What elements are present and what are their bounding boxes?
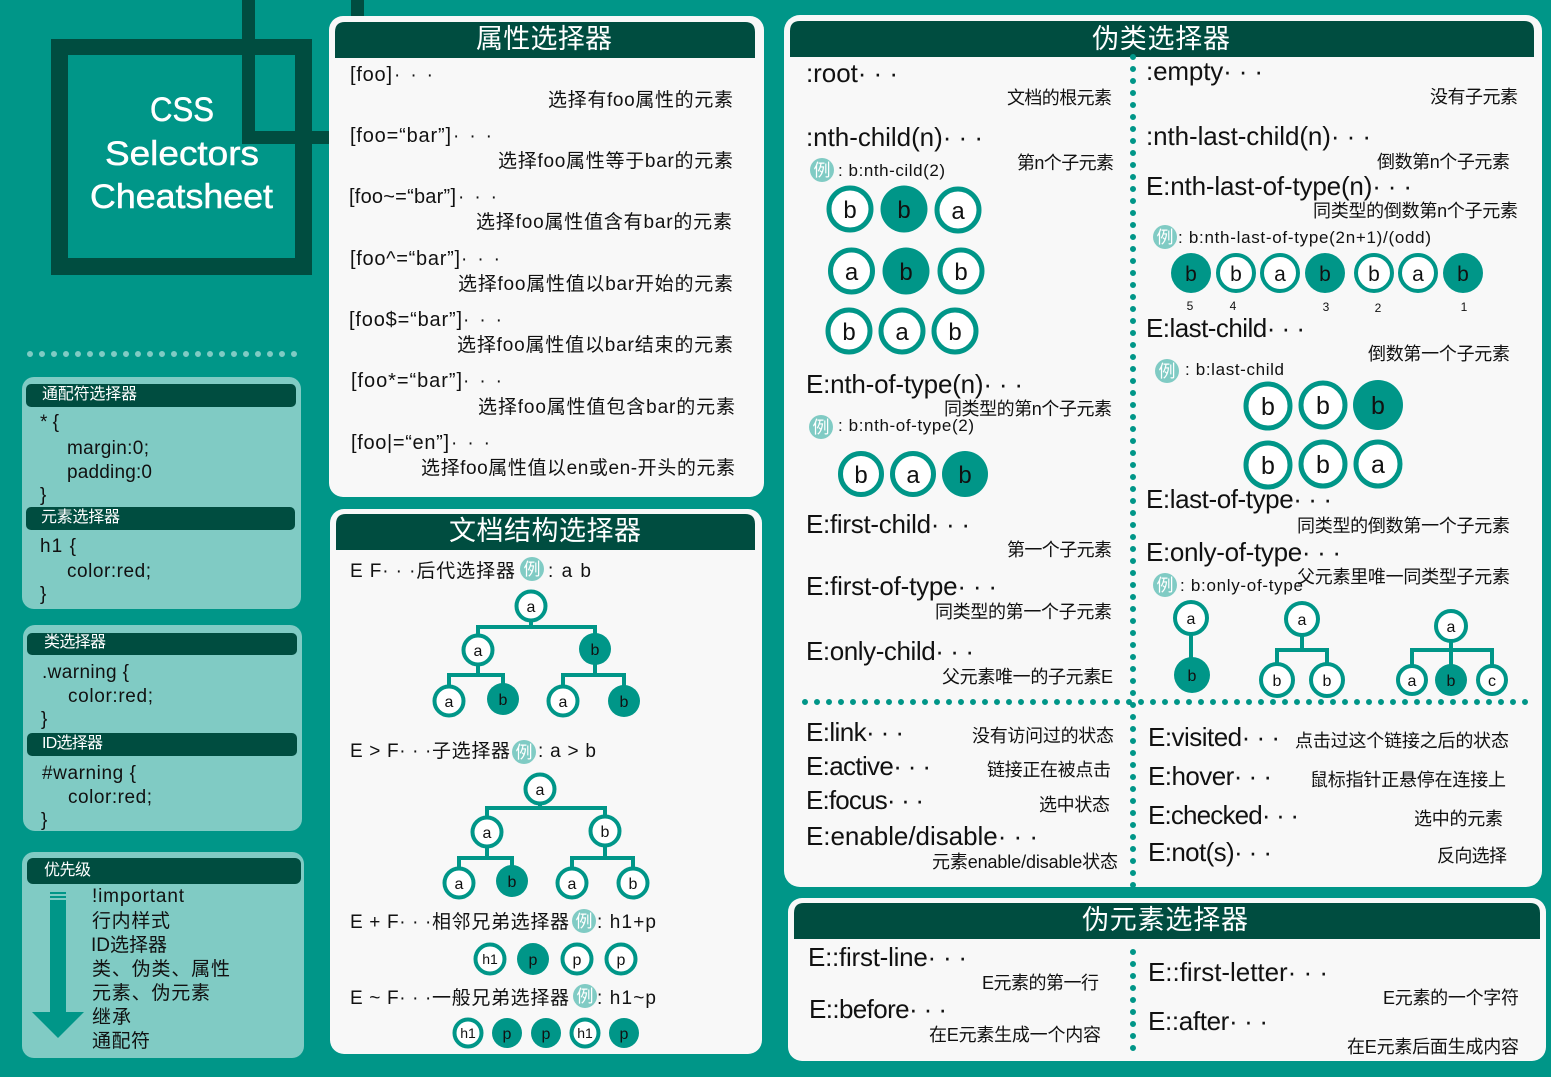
- circles: nth-last-of-type: 4: [1230, 299, 1237, 313]
- entry: [foo="bar"]: 选择foo属性等于bar的元素: [498, 150, 733, 172]
- entry: last-child: 倒数第一个子元素: [1368, 344, 1510, 364]
- tree: descendant example: b: [591, 642, 600, 659]
- entry: only-of-type: 父元素里唯一同类型子元素: [1297, 567, 1510, 587]
- entry: descendant selector: : a b: [548, 561, 591, 582]
- entry: descendant selector: [350, 557, 591, 582]
- circles: nth-child: b: [948, 319, 962, 346]
- entry: first-of-type: 同类型的第一个子元素: [935, 602, 1112, 622]
- panel: universal and element selectors: [22, 377, 301, 609]
- code: universal selector: padding:0: [67, 462, 152, 483]
- entry: first-child: [806, 509, 1112, 560]
- entry: [foo$="bar"]: · · ·: [463, 310, 502, 331]
- entry: [foo~="bar"]: [349, 186, 732, 233]
- entry: root: 文档的根元素: [1007, 88, 1112, 108]
- entry: enable/disable: E:enable/disable· · ·: [806, 821, 1038, 851]
- entry: nth-of-type: E:nth-of-type(n)· · ·: [806, 369, 1023, 399]
- code: universal selector: }: [40, 485, 46, 506]
- trees: only-of-type: a: [1187, 611, 1196, 628]
- entry: empty: [1146, 56, 1518, 107]
- panel: attribute selectors: [329, 16, 764, 497]
- entry: first-line: E元素的第一行: [982, 973, 1099, 993]
- circles: nth-last-of-type: b: [1319, 263, 1331, 286]
- entry: general sibling selector: : h1~p: [597, 988, 656, 1009]
- circles: nth-of-type: a: [906, 462, 920, 489]
- entry: checked: E:checked· · ·: [1148, 800, 1299, 830]
- trees: only-of-type: [1174, 602, 1506, 696]
- heading: pseudo-class selectors: 伪类选择器: [1092, 24, 1230, 54]
- example: last-child: 例: [1158, 362, 1176, 381]
- entry: [foo]: 选择有foo属性的元素: [548, 89, 733, 111]
- entry: after: E::after· · ·: [1148, 1006, 1268, 1036]
- entry: [foo~="bar"]: · · ·: [458, 187, 497, 208]
- circles: last-child: a: [1371, 451, 1385, 479]
- trees: only-of-type: a: [1408, 673, 1417, 690]
- entry: only-child: [806, 636, 1113, 687]
- tree: child example: b: [508, 874, 517, 891]
- entry: focus: E:focus· · ·: [806, 785, 924, 815]
- entry: general sibling selector: E ~ F· · ·一般兄弟选择器: [350, 987, 569, 1009]
- code: element selector: }: [40, 584, 46, 605]
- entry: nth-last-child: [1146, 121, 1510, 172]
- entry: [foo]: · · ·: [394, 65, 433, 86]
- heading: class selector: [27, 633, 297, 655]
- list: priority order: !important: [92, 886, 185, 907]
- entry: adjacent sibling selector: E + F· · ·相邻兄弟选择器: [350, 911, 569, 933]
- entry: active: [806, 751, 1111, 781]
- circles: nth-last-of-type: [1171, 253, 1483, 315]
- circles: nth-last-of-type: b: [1368, 263, 1380, 286]
- entry: nth-last-child: 倒数第n个子元素: [1377, 152, 1510, 172]
- title block: [51, 0, 364, 275]
- entry: [foo^="bar"]: · · ·: [461, 249, 500, 270]
- panel: pseudo-class selectors: [784, 15, 1542, 887]
- heading: id selector: [27, 733, 297, 756]
- heading: priority: 优先级: [44, 861, 91, 879]
- circles: adjacent sibling example: p: [529, 952, 538, 969]
- code: class selector: [41, 662, 153, 730]
- circles: nth-last-of-type: 2: [1375, 301, 1382, 315]
- entry: [foo$="bar"]: [349, 309, 733, 356]
- circles: last-child: b: [1261, 452, 1275, 480]
- entry: [foo^="bar"]: 选择foo属性值以bar开始的元素: [458, 273, 733, 295]
- entry: [foo^="bar"]: [foo^=“bar”]: [350, 248, 460, 270]
- heading: id selector: ID选择器: [42, 734, 103, 752]
- circles: adjacent sibling example: p: [573, 952, 582, 969]
- entry: not: 反向选择: [1437, 846, 1507, 866]
- circles: last-child: [1246, 380, 1403, 487]
- example: nth-last-of-type: : b:nth-last-of-type(2n+1)/(odd): [1178, 228, 1431, 247]
- entry: general sibling selector: [350, 984, 656, 1009]
- entry: before: 在E元素生成一个内容: [929, 1025, 1101, 1045]
- entry: child selector: [350, 740, 596, 764]
- entry: last-child: [1146, 313, 1510, 364]
- entry: before: [809, 994, 1101, 1045]
- circles: nth-of-type: [840, 451, 988, 497]
- circles: nth-child: b: [897, 197, 911, 224]
- entry: last-of-type: E:last-of-type· · ·: [1146, 484, 1332, 514]
- trees: only-of-type: b: [1273, 673, 1282, 690]
- circles: nth-child: a: [951, 198, 965, 225]
- entry: [foo="bar"]: [foo=“bar”]: [350, 125, 451, 147]
- example: only-of-type: 例: [1156, 576, 1174, 595]
- entry: adjacent sibling selector: 例: [576, 912, 592, 931]
- trees: only-of-type: b: [1188, 668, 1197, 685]
- entry: first-letter: E元素的一个字符: [1383, 988, 1519, 1008]
- circles: nth-last-of-type: 1: [1461, 300, 1468, 314]
- circles: adjacent sibling example: h1: [482, 951, 498, 967]
- example: only-of-type: : b:only-of-type: [1180, 576, 1303, 595]
- code: class selector: }: [41, 709, 47, 730]
- heading: attribute selectors: [335, 22, 755, 58]
- list: priority order: 类、伪类、属性: [92, 958, 230, 980]
- code: id selector: [41, 763, 152, 831]
- circles: nth-of-type: b: [854, 462, 868, 489]
- trees: only-of-type: b: [1447, 673, 1456, 690]
- circles: general sibling example: h1: [460, 1025, 476, 1041]
- circles: nth-child: [828, 186, 982, 352]
- entry: first-letter: E::first-letter· · ·: [1148, 957, 1328, 987]
- entry: enable/disable: [806, 821, 1118, 872]
- entry: [foo^="bar"]: [350, 248, 733, 295]
- example: nth-of-type: [809, 415, 974, 439]
- entry: nth-last-of-type: 同类型的倒数第n个子元素: [1313, 201, 1518, 221]
- list: priority order: [91, 886, 230, 1052]
- circles: nth-last-of-type: b: [1230, 263, 1242, 286]
- tree: descendant example: b: [620, 694, 629, 711]
- code: class selector: color:red;: [68, 686, 153, 707]
- circles: nth-child: b: [899, 259, 913, 286]
- entry: nth-of-type: [806, 369, 1112, 419]
- entry: hover: [1148, 761, 1506, 791]
- entry: last-child: E:last-child· · ·: [1146, 313, 1305, 343]
- entry: only-of-type: E:only-of-type· · ·: [1146, 537, 1341, 567]
- circles: last-child: b: [1371, 392, 1385, 420]
- heading: universal selector: [26, 384, 296, 407]
- entry: only-of-type: [1146, 537, 1510, 587]
- tree: descendant example: a: [527, 599, 536, 616]
- circles: nth-child: a: [895, 319, 909, 346]
- title block: CSS: [150, 91, 214, 129]
- entry: checked: 选中的元素: [1414, 809, 1503, 829]
- code: id selector: }: [41, 810, 47, 831]
- entry: first-line: E::first-line· · ·: [808, 942, 967, 972]
- entry: [foo="bar"]: · · ·: [453, 126, 492, 147]
- circles: adjacent sibling example: p: [617, 952, 626, 969]
- entry: [foo~="bar"]: 选择foo属性值含有bar的元素: [476, 211, 732, 233]
- entry: [foo*="bar"]: [foo*=“bar”]: [351, 370, 462, 392]
- list: priority order: ID选择器: [91, 934, 167, 956]
- circles: general sibling example: p: [503, 1026, 512, 1043]
- circles: nth-child: a: [845, 259, 859, 286]
- heading: pseudo-element selectors: 伪元素选择器: [1082, 905, 1248, 935]
- entry: active: 链接正在被点击: [987, 760, 1111, 780]
- entry: after: 在E元素后面生成内容: [1347, 1037, 1519, 1057]
- panel: pseudo-element selectors: [788, 898, 1546, 1061]
- entry: [foo*="bar"]: 选择foo属性值包含bar的元素: [478, 396, 735, 418]
- tree: descendant example: a: [445, 694, 454, 711]
- entry: active: E:active· · ·: [806, 751, 931, 781]
- code: universal selector: * {: [40, 412, 60, 433]
- list: priority order: 元素、伪元素: [92, 982, 210, 1004]
- entry: child selector: E > F· · ·子选择器: [350, 740, 510, 762]
- entry: child selector: : a > b: [538, 741, 596, 762]
- code: id selector: #warning {: [42, 763, 137, 784]
- entry: first-of-type: [806, 571, 1112, 622]
- tree: child example: a: [568, 876, 577, 893]
- entry: [foo="bar"]: [350, 125, 733, 172]
- entry: nth-child: :nth-child(n)· · ·: [806, 122, 983, 152]
- example: last-child: [1155, 359, 1284, 383]
- circles: nth-of-type: b: [958, 462, 972, 489]
- tree: child example: a: [483, 825, 492, 842]
- entry: only-child: E:only-child· · ·: [806, 636, 974, 666]
- entry: checked: [1148, 800, 1503, 830]
- entry: first-line: [808, 942, 1099, 993]
- entry: root: :root· · ·: [806, 58, 898, 88]
- entry: visited: E:visited· · ·: [1148, 722, 1280, 752]
- circles: general sibling example: h1: [577, 1025, 593, 1041]
- entry: [foo|="en"]: [foo|=“en”]: [351, 432, 449, 454]
- entry: link: 没有访问过的状态: [972, 726, 1114, 746]
- heading: document structure selectors: [336, 514, 755, 550]
- circles: adjacent sibling example: [476, 943, 636, 975]
- entry: only-child: 父元素唯一的子元素E: [942, 667, 1113, 687]
- code: universal selector: margin:0;: [67, 438, 149, 459]
- example: last-child: : b:last-child: [1185, 360, 1284, 379]
- circles: nth-last-of-type: a: [1412, 263, 1424, 286]
- tree: descendant example: [434, 592, 640, 717]
- entry: first-letter: [1148, 957, 1519, 1008]
- tree: child example: a: [455, 876, 464, 893]
- tree: descendant example: a: [474, 643, 483, 660]
- list: priority order: 行内样式: [92, 910, 170, 932]
- entry: nth-child: [806, 122, 1114, 173]
- entry: enable/disable: 元素enable/disable状态: [932, 852, 1118, 872]
- circles: nth-last-of-type: 5: [1187, 299, 1194, 313]
- entry: first-child: 第一个子元素: [1007, 540, 1112, 560]
- code: class selector: .warning {: [42, 662, 130, 683]
- circles: nth-last-of-type: a: [1274, 263, 1286, 286]
- heading: class selector: 类选择器: [44, 633, 106, 651]
- entry: [foo$="bar"]: [foo$=“bar”]: [349, 309, 462, 331]
- entry: [foo]: [foo]: [350, 64, 392, 86]
- trees: only-of-type: c: [1488, 673, 1496, 690]
- entry: visited: [1148, 722, 1509, 752]
- panel: class and id selectors: [23, 625, 302, 831]
- entry: adjacent sibling selector: : h1+p: [597, 912, 656, 933]
- entry: focus: 选中状态: [1039, 795, 1110, 815]
- tree: child example: a: [536, 782, 545, 799]
- entry: empty: :empty· · ·: [1146, 56, 1263, 86]
- entry: general sibling selector: 例: [576, 987, 594, 1006]
- circles: last-child: b: [1316, 451, 1330, 479]
- entry: [foo~="bar"]: [foo~=“bar”]: [349, 186, 456, 208]
- circles: nth-last-of-type: b: [1457, 263, 1469, 286]
- example: nth-child: [810, 158, 945, 182]
- entry: [foo*="bar"]: · · ·: [463, 371, 502, 392]
- list: priority order: 继承: [92, 1006, 131, 1028]
- title block: Cheatsheet: [90, 178, 274, 216]
- entry: link: [806, 717, 1114, 747]
- entry: child selector: 例: [516, 743, 532, 762]
- trees: only-of-type: b: [1323, 673, 1332, 690]
- entry: before: E::before· · ·: [809, 994, 947, 1024]
- list: priority order: 通配符: [92, 1030, 150, 1052]
- tree: descendant example: b: [499, 692, 508, 709]
- code: element selector: h1 {: [40, 536, 77, 557]
- tree: child example: b: [629, 876, 638, 893]
- heading: priority: [27, 858, 301, 884]
- heading: pseudo-element selectors: [794, 903, 1540, 939]
- entry: nth-child: 第n个子元素: [1017, 153, 1114, 173]
- entry: [foo|="en"]: [351, 432, 735, 479]
- circles: nth-child: b: [843, 197, 857, 224]
- code: universal selector: [40, 412, 152, 506]
- entry: hover: 鼠标指针正悬停在连接上: [1310, 770, 1506, 790]
- heading: universal selector: 通配符选择器: [42, 385, 137, 403]
- circles: nth-child: b: [954, 259, 968, 286]
- arrow: priority order: [32, 892, 84, 1038]
- heading: document structure selectors: 文档结构选择器: [449, 516, 641, 546]
- entry: adjacent sibling selector: [350, 909, 656, 933]
- entry: visited: 点击过这个链接之后的状态: [1295, 731, 1509, 751]
- entry: root: [806, 58, 1112, 108]
- circles: general sibling example: [454, 1018, 639, 1048]
- entry: not: [1148, 837, 1507, 867]
- heading: attribute selectors: 属性选择器: [476, 24, 612, 54]
- example: nth-child: 例: [814, 161, 830, 180]
- heading: element selector: 元素选择器: [41, 508, 120, 526]
- entry: nth-of-type: 同类型的第n个子元素: [944, 399, 1112, 419]
- trees: only-of-type: a: [1447, 619, 1456, 636]
- entry: first-child: E:first-child· · ·: [806, 509, 970, 539]
- heading: element selector: [26, 507, 295, 530]
- tree: child example: [444, 774, 648, 898]
- code: element selector: color:red;: [67, 561, 151, 582]
- trees: only-of-type: a: [1298, 612, 1307, 629]
- entry: descendant selector: 例: [524, 560, 540, 579]
- example: nth-of-type: 例: [812, 418, 830, 437]
- circles: nth-last-of-type: 3: [1323, 300, 1330, 314]
- entry: after: [1148, 1006, 1519, 1057]
- entry: [foo*="bar"]: [351, 370, 735, 418]
- example: nth-last-of-type: 例: [1156, 228, 1174, 247]
- example: only-of-type: [1153, 573, 1303, 597]
- circles: general sibling example: p: [620, 1026, 629, 1043]
- entry: nth-last-of-type: E:nth-last-of-type(n)· · ·: [1146, 171, 1412, 201]
- heading: pseudo-class selectors: [790, 21, 1534, 57]
- example: nth-of-type: : b:nth-of-type(2): [838, 416, 974, 435]
- circles: nth-child: b: [842, 319, 856, 346]
- tree: child example: b: [601, 824, 610, 841]
- entry: [foo$="bar"]: 选择foo属性值以bar结束的元素: [457, 334, 733, 356]
- circles: general sibling example: p: [542, 1026, 551, 1043]
- example: nth-child: : b:nth-cild(2): [838, 161, 945, 180]
- panel: priority: [22, 852, 304, 1058]
- entry: nth-last-of-type: [1146, 171, 1518, 221]
- circles: last-child: b: [1261, 393, 1275, 421]
- entry: first-of-type: E:first-of-type· · ·: [806, 571, 997, 601]
- entry: [foo|="en"]: 选择foo属性值以en或en-开头的元素: [421, 457, 735, 479]
- entry: descendant selector: E F· · ·后代选择器: [350, 560, 515, 582]
- title block: Selectors: [105, 135, 259, 173]
- circles: nth-last-of-type: b: [1185, 263, 1197, 286]
- tree: descendant example: a: [559, 694, 568, 711]
- entry: link: E:link· · ·: [806, 717, 904, 747]
- entry: empty: 没有子元素: [1430, 87, 1518, 107]
- entry: nth-last-child: :nth-last-child(n)· · ·: [1146, 121, 1371, 151]
- circles: last-child: b: [1316, 392, 1330, 420]
- entry: focus: [806, 785, 1110, 815]
- entry: last-of-type: 同类型的倒数第一个子元素: [1297, 516, 1510, 536]
- entry: hover: E:hover· · ·: [1148, 761, 1272, 791]
- code: element selector: [40, 536, 151, 605]
- entry: not: E:not(s)· · ·: [1148, 837, 1272, 867]
- entry: [foo]: [350, 64, 733, 111]
- panel: document structure selectors: [330, 509, 762, 1054]
- entry: last-of-type: [1146, 484, 1510, 536]
- entry: [foo|="en"]: · · ·: [451, 433, 490, 454]
- code: id selector: color:red;: [68, 787, 152, 808]
